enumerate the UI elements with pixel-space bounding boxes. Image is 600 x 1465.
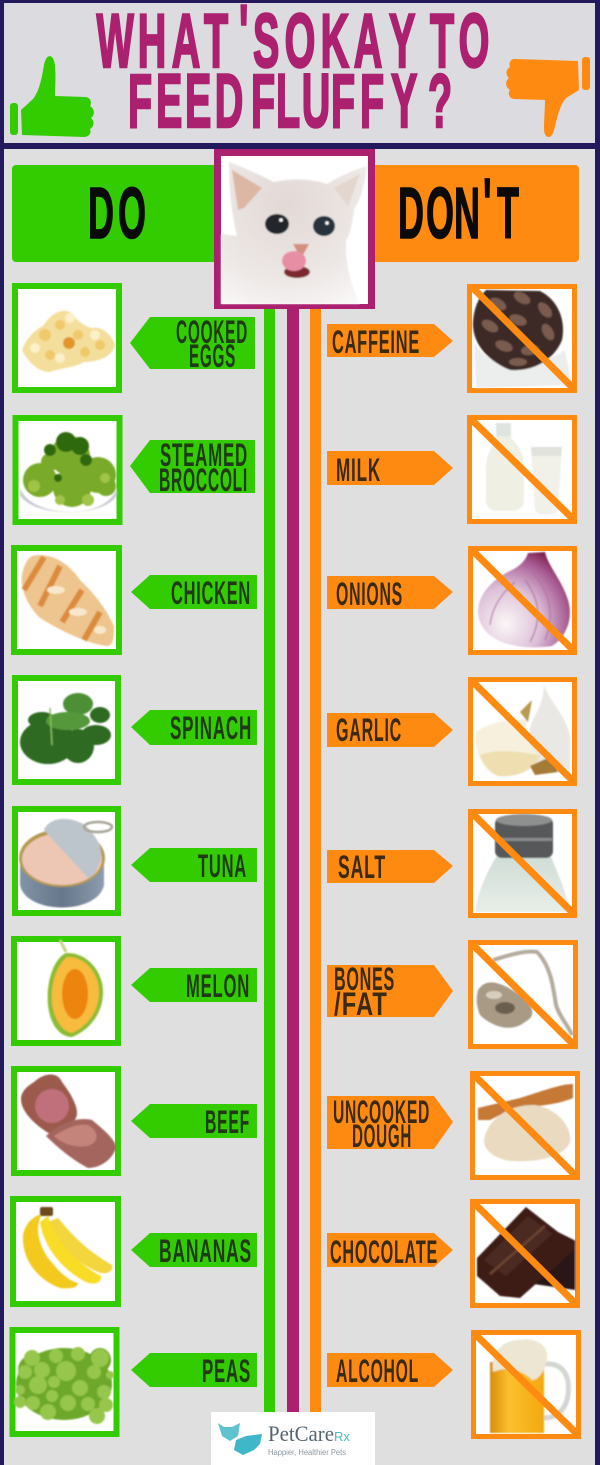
vertical rail: green bbox=[264, 262, 275, 1465]
arrow: onions: ONIONS bbox=[336, 576, 403, 612]
row 8 don't: chocolate bbox=[472, 1202, 578, 1306]
row 3 do: chicken bbox=[14, 548, 119, 652]
arrow: chicken bbox=[131, 575, 257, 611]
arrow: peas bbox=[131, 1353, 257, 1389]
arrow: bananas bbox=[131, 1233, 257, 1269]
row 2 do: steamed broccoli bbox=[16, 418, 120, 522]
row 4 do: spinach bbox=[15, 678, 118, 782]
arrow: cooked eggs: EGGS bbox=[189, 338, 236, 374]
logo: PetCareRx: PetCare bbox=[268, 1421, 334, 1446]
row 6 do: melon bbox=[14, 939, 118, 1043]
banner: don't: DON'T bbox=[398, 164, 519, 254]
arrow: caffeine: CAFFEINE bbox=[332, 324, 420, 360]
vertical rail: purple bbox=[287, 262, 299, 1465]
arrow: bananas: BANANAS bbox=[159, 1233, 252, 1269]
logo: PetCareRx: Happier, Healthier Pets bbox=[268, 1448, 346, 1457]
arrow: salt bbox=[327, 849, 453, 885]
arrow: bones/fat: BONES bbox=[334, 961, 395, 997]
arrow: cooked eggs bbox=[130, 314, 255, 374]
arrow: steamed broccoli bbox=[130, 437, 255, 498]
vertical rail: orange bbox=[310, 262, 321, 1465]
arrow: steamed broccoli: STEAMED bbox=[160, 437, 248, 473]
arrow: uncooked dough: UNCOOKED bbox=[333, 1094, 430, 1130]
arrow: tuna: TUNA bbox=[198, 848, 247, 884]
row 5 don't: salt bbox=[470, 812, 574, 916]
arrow: caffeine bbox=[327, 324, 453, 360]
row 5 do: tuna bbox=[15, 809, 118, 913]
row 8 do: bananas bbox=[13, 1199, 118, 1304]
arrow: milk bbox=[327, 451, 453, 488]
row 9 don't: alcohol bbox=[474, 1332, 578, 1436]
arrow: spinach: SPINACH bbox=[170, 710, 252, 746]
arrow: cooked eggs: COOKED bbox=[176, 314, 248, 350]
arrow: peas: PEAS bbox=[202, 1353, 251, 1389]
row 4 don't: garlic bbox=[470, 680, 574, 784]
arrow: bones/fat bbox=[327, 961, 453, 1022]
icon: thumbs up bbox=[10, 56, 94, 137]
arrow: milk: MILK bbox=[336, 452, 381, 488]
arrow: tuna bbox=[131, 848, 257, 884]
arrow: melon: MELON bbox=[186, 968, 250, 1004]
arrow: spinach bbox=[131, 710, 257, 746]
arrow: garlic: GARLIC bbox=[336, 712, 402, 748]
row 7 do: beef bbox=[14, 1069, 118, 1173]
row 1 do: cooked eggs bbox=[15, 286, 119, 390]
arrow: uncooked dough bbox=[327, 1094, 453, 1154]
row 3 don't: onions bbox=[470, 548, 574, 652]
arrow: steamed broccoli: BROCCOLI bbox=[159, 462, 248, 498]
banner: do: DO bbox=[88, 173, 146, 254]
arrow: chicken: CHICKEN bbox=[171, 575, 251, 611]
row 1 don't: caffeine bbox=[470, 286, 574, 390]
logo: PetCareRx: Rx bbox=[334, 1429, 350, 1444]
row 7 don't: uncooked dough bbox=[472, 1074, 578, 1178]
title: FEED FLUFFY? bbox=[128, 58, 452, 143]
arrow: chocolate: CHOCOLATE bbox=[330, 1234, 438, 1270]
arrow: uncooked dough: DOUGH bbox=[352, 1118, 412, 1154]
banner: don't bbox=[368, 164, 579, 262]
cat portrait bbox=[214, 149, 375, 309]
arrow: melon bbox=[131, 968, 257, 1004]
arrow: beef bbox=[131, 1104, 257, 1140]
arrow: bones/fat: /FAT bbox=[334, 986, 388, 1022]
row 6 don't: bones/fat bbox=[470, 942, 576, 1046]
arrow: beef: BEEF bbox=[205, 1104, 250, 1140]
banner: do bbox=[12, 165, 222, 262]
row 2 don't: milk bbox=[470, 418, 574, 522]
row 9 do: peas bbox=[12, 1330, 116, 1434]
arrow: alcohol: ALCOHOL bbox=[336, 1353, 419, 1389]
arrow: alcohol bbox=[327, 1353, 453, 1389]
arrow: chocolate bbox=[327, 1233, 453, 1270]
title bbox=[97, 0, 489, 143]
icon: thumbs down bbox=[506, 57, 590, 137]
logo: PetCareRx bbox=[211, 1412, 375, 1465]
arrow: salt: SALT bbox=[338, 849, 386, 885]
